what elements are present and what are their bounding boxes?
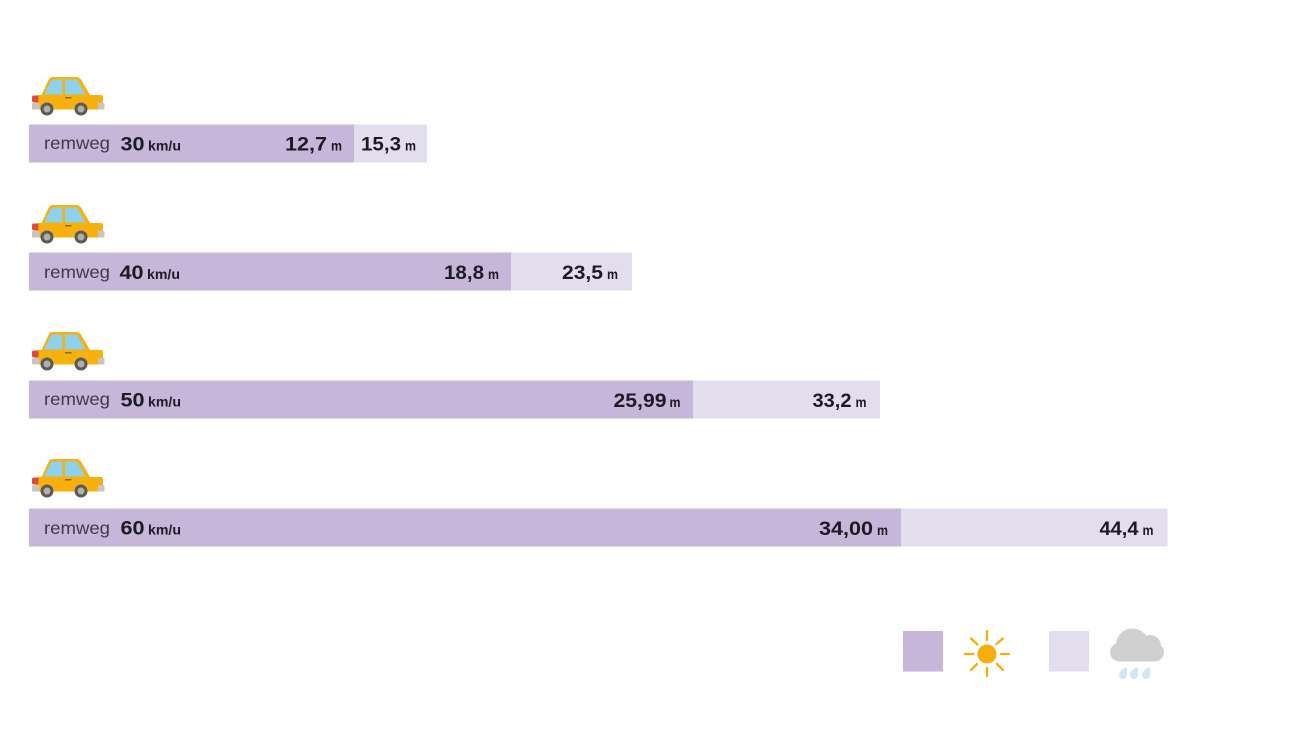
bar row: 30 km/u: m (331, 138, 342, 154)
bar row: 60 km/u: 34,00 (819, 519, 873, 540)
bar row: 40 km/u: km/u (147, 267, 180, 282)
bar row: 50 km/u (29, 380, 880, 418)
bar row: 60 km/u: 60 (120, 518, 144, 540)
bar row: 40 km/u (29, 252, 632, 290)
bar row: 60 km/u: remweg (44, 518, 110, 538)
bar row: 30 km/u: 15,3 (361, 134, 401, 156)
icon: car 30 km/u (32, 77, 104, 116)
bar row: 40 km/u: remweg (44, 262, 110, 282)
bar row: 50 km/u: 25,99 (614, 391, 666, 412)
bar row: 50 km/u: km/u (148, 394, 181, 410)
icon: car 40 km/u (32, 205, 104, 244)
bar row: 40 km/u: 23,5 (562, 263, 603, 284)
bar row: 30 km/u: 12,7 (285, 134, 327, 156)
bar row: 50 km/u: 50 (120, 390, 144, 412)
bar row: 60 km/u (29, 508, 1168, 546)
bar row: 60 km/u: m (1142, 523, 1154, 538)
bar row: 30 km/u: 30 (120, 134, 144, 156)
icon: sun (965, 631, 1009, 676)
icon: car 60 km/u (32, 459, 104, 498)
bar row: 40 km/u: 18,8 (444, 263, 484, 284)
bar row: 40 km/u: m (488, 267, 499, 282)
bar row: 30 km/u: km/u (148, 138, 181, 154)
bar row: 60 km/u: km/u (148, 522, 181, 538)
legend: wet weather swatch (1049, 631, 1089, 672)
bar row: 30 km/u (29, 124, 427, 162)
icon: car 50 km/u (32, 332, 104, 370)
bar row: 40 km/u: 40 (120, 263, 144, 284)
bar row: 60 km/u: m (877, 523, 888, 538)
bar row: 40 km/u: m (607, 267, 618, 282)
bar row: 30 km/u: m (405, 138, 416, 154)
bar row: 50 km/u: 33,2 (812, 391, 852, 412)
legend: dry weather swatch (903, 631, 943, 672)
bar row: 60 km/u: 44,4 (1100, 519, 1139, 540)
bar row: 50 km/u: m (856, 395, 866, 410)
bar row: 50 km/u: remweg (44, 389, 110, 409)
bar row: 50 km/u: m (670, 395, 680, 410)
bar row: 30 km/u: remweg (44, 133, 110, 153)
icon: rain cloud (1110, 628, 1164, 679)
